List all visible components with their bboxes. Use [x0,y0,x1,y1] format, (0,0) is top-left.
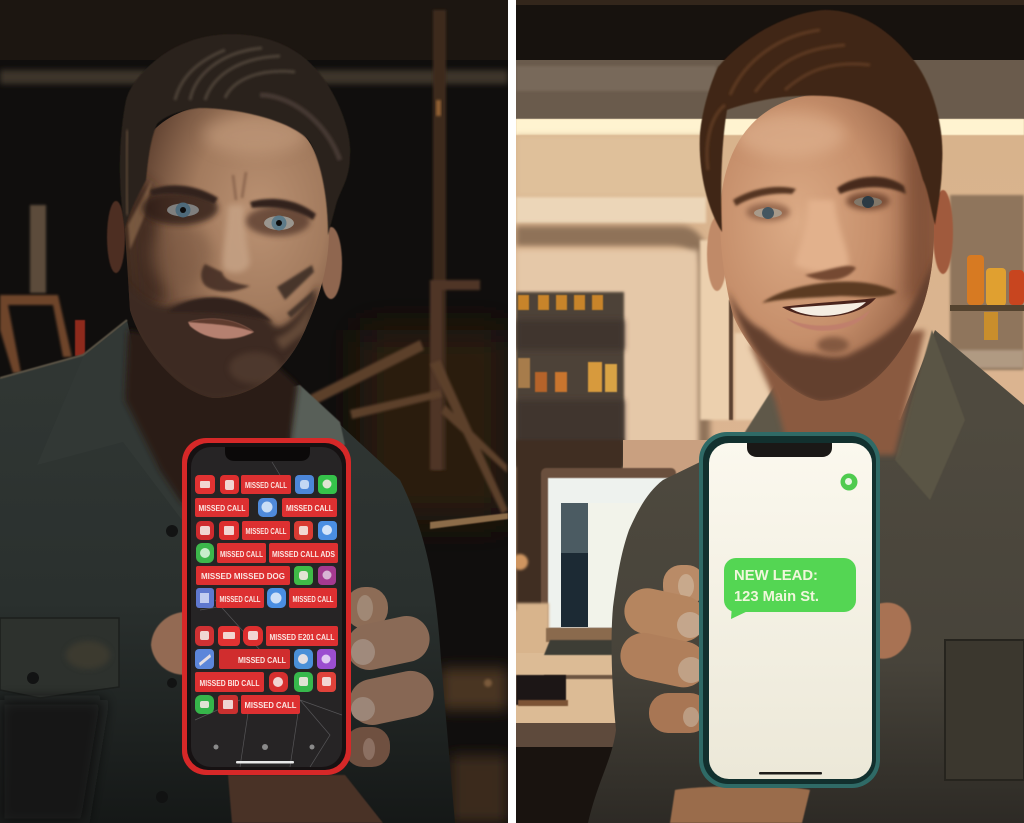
hair: right man [700,10,942,232]
finger 1 [351,587,388,628]
eye: left [746,203,790,221]
right shadow [905,120,934,300]
tool board right [950,195,1024,370]
nose shadow [805,266,856,280]
wrist [228,775,383,823]
icon grid [195,475,337,714]
missed call notification labels: MISSED CALL [238,655,286,665]
home indicator [759,772,822,774]
desk [516,603,636,823]
collar right [288,385,345,445]
missed call notification labels: MISSED MISSED DOG [201,571,285,581]
panel: left stressed scene [0,0,508,823]
missed call notification labels: MISSED CALL [244,700,296,710]
notch [225,447,310,461]
ear: right man left [707,217,727,291]
thumb right [878,603,911,659]
brow: right [250,199,316,220]
soul patch [817,337,849,353]
missed call notification labels: MISSED CALL [198,503,246,513]
cracked screen [191,447,342,767]
white screen [709,443,872,779]
home indicator [236,761,294,764]
shoulder edge highlight [0,320,127,378]
wrist [670,786,810,823]
frown lines [233,172,246,200]
missed call notification labels: MISSED CALL [220,549,263,559]
shirt pocket [945,640,1024,780]
missed call notification labels: MISSED CALL [286,503,333,513]
missed call notification labels: MISSED CALL ADS [272,549,335,559]
mustache [168,297,272,322]
ear: right man right [933,190,953,274]
hair streaks [175,48,295,100]
brow: left [150,185,218,204]
finger 2 [620,584,710,646]
ear: left man left [107,201,125,273]
phone: teal case with new lead message [699,432,880,788]
hair: left man [120,34,350,235]
neck: left man [125,330,298,503]
thumb left [150,612,182,676]
eye sockets [142,191,218,225]
eye: right [846,192,890,210]
finger 4 [345,727,390,767]
phone body [182,438,351,775]
brow: right [837,177,906,194]
lips [188,319,254,339]
hair streaks [707,30,870,170]
status icon [840,474,858,490]
collar left [745,385,800,495]
face: left man [124,103,329,400]
smile [782,298,876,317]
divider gap [508,0,516,823]
phone body [699,432,880,788]
brown smudge [66,641,110,669]
pocket [0,618,119,698]
neck: right man [750,330,925,455]
right cheek lower [275,304,313,350]
message text: NEW LEAD: [734,567,818,584]
ear: left man right [320,227,342,299]
mustache [762,282,897,303]
grease stripes on cheek [277,265,314,318]
notch [747,443,832,457]
missed call notification labels: MISSED E201 CALL [270,632,334,642]
ceiling light strip [516,119,1024,135]
missed call notification labels: MISSED CALL [246,526,286,536]
beard [728,255,936,403]
missed call notification labels [195,475,338,714]
eye: right [264,216,294,230]
collar right [895,330,965,500]
nose bridge [223,205,250,273]
dark wall lower left [516,440,623,610]
missed call notification labels: MISSED BID CALL [200,678,260,688]
missed call notification labels: MISSED CALL [245,480,287,490]
workshop background [0,0,508,823]
chin stubble [229,352,281,384]
office background [512,0,1024,823]
nose shadow [201,264,250,292]
brow: left [733,187,796,206]
left cheek shadow [128,178,170,305]
buttons [27,672,39,684]
face: right man [720,93,936,403]
missed call notification labels: MISSED CALL [292,594,334,604]
dock dots [214,744,314,750]
eye: left [167,202,199,218]
temple light streak [128,180,152,250]
finger 3 [351,670,434,725]
candle glow [512,554,528,570]
monitor [541,468,676,638]
panel: right relaxed scene [512,0,1024,823]
forehead highlight [735,113,845,157]
nose bridge [795,200,849,273]
tool shelf left [516,292,624,467]
finger 3 [616,629,711,692]
collar left [37,322,182,520]
shirt: left man [0,320,455,823]
hand: left man fingers [151,587,438,823]
missed call notification labels: MISSED CALL [220,594,260,604]
phone: red case with missed call notifications [182,438,351,775]
finger 4 [649,693,709,733]
forehead highlight [203,115,307,155]
shirt: right man [588,330,1024,823]
lower lip [786,310,870,331]
message bubble: 123 Main St. [734,588,819,605]
beard [124,280,318,400]
message bubble [724,558,856,619]
finger 1 [663,565,705,605]
hand: right man fingers [616,565,911,823]
finger 2 [351,616,430,670]
